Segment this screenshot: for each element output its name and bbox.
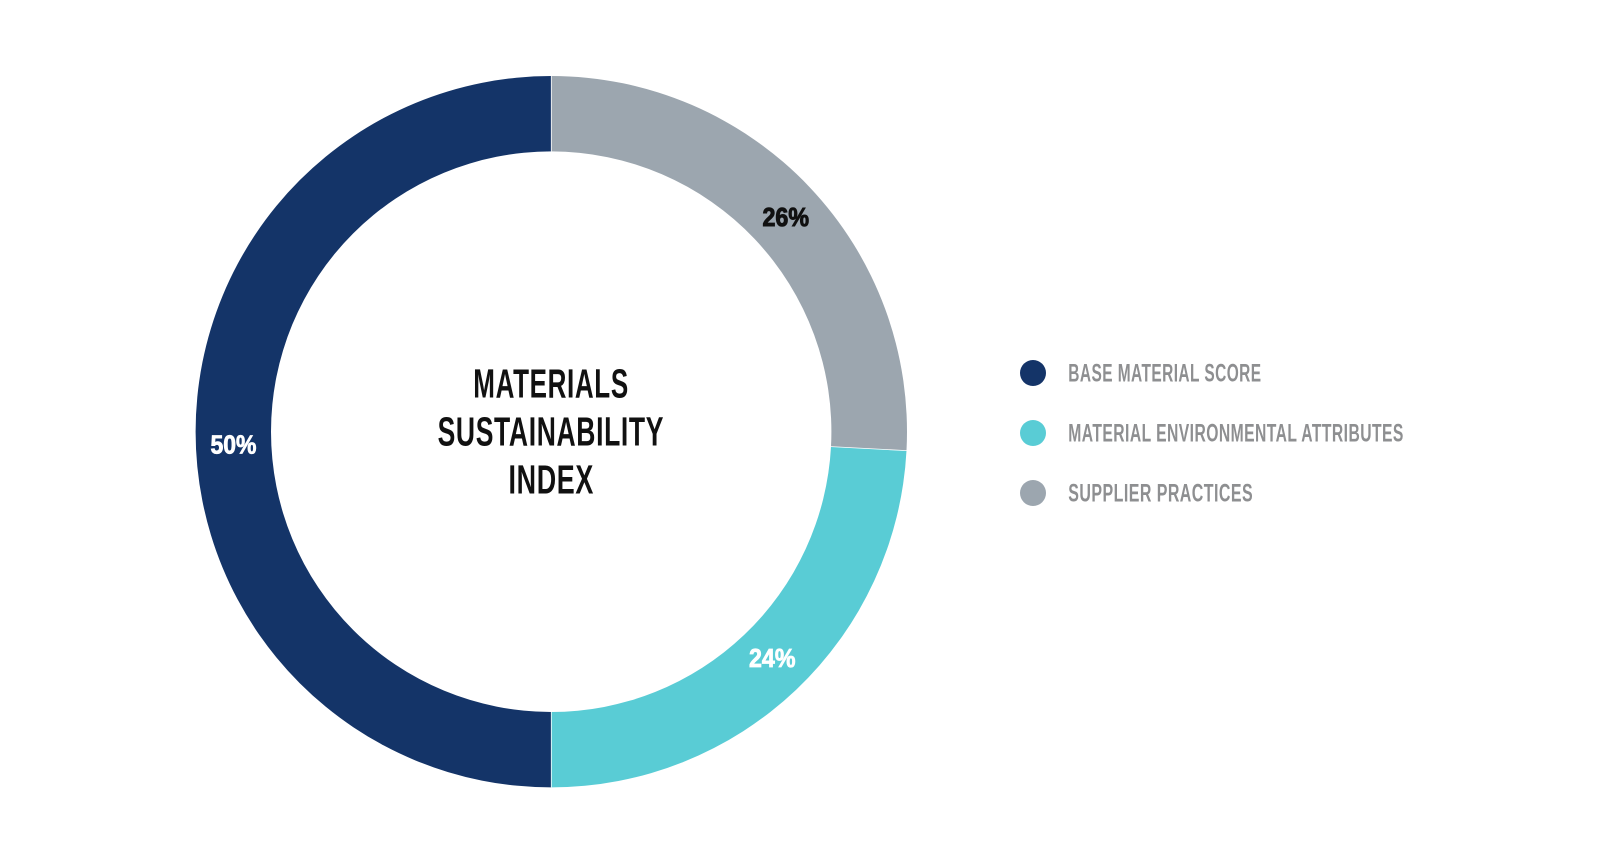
center title: SUSTAINABILITY <box>438 408 664 454</box>
center title <box>438 360 664 502</box>
value label: 50%: 50% <box>210 429 256 459</box>
legend item: supplier practices: SUPPLIER PRACTICES <box>1068 481 1253 508</box>
legend item: base material score: BASE MATERIAL SCORE <box>1068 361 1262 388</box>
value label: 26%: 26% <box>762 202 809 232</box>
donut chart <box>196 76 907 787</box>
legend <box>1020 360 1404 508</box>
value label: 24%: 24% <box>749 643 796 673</box>
legend item: material environmental attributes: MATERIAL ENVIRONMENTAL ATTRIBUTES <box>1068 421 1404 448</box>
segment: material environmental attributes 24% <box>551 447 906 787</box>
segment: supplier practices 26% <box>551 76 907 451</box>
legend item: supplier practices <box>1020 480 1253 508</box>
legend item: base material score <box>1020 360 1262 388</box>
center title: INDEX <box>508 456 594 502</box>
segment: base material score 50% <box>196 76 551 787</box>
legend item: material environmental attributes <box>1020 420 1404 448</box>
center title: MATERIALS <box>473 360 629 406</box>
